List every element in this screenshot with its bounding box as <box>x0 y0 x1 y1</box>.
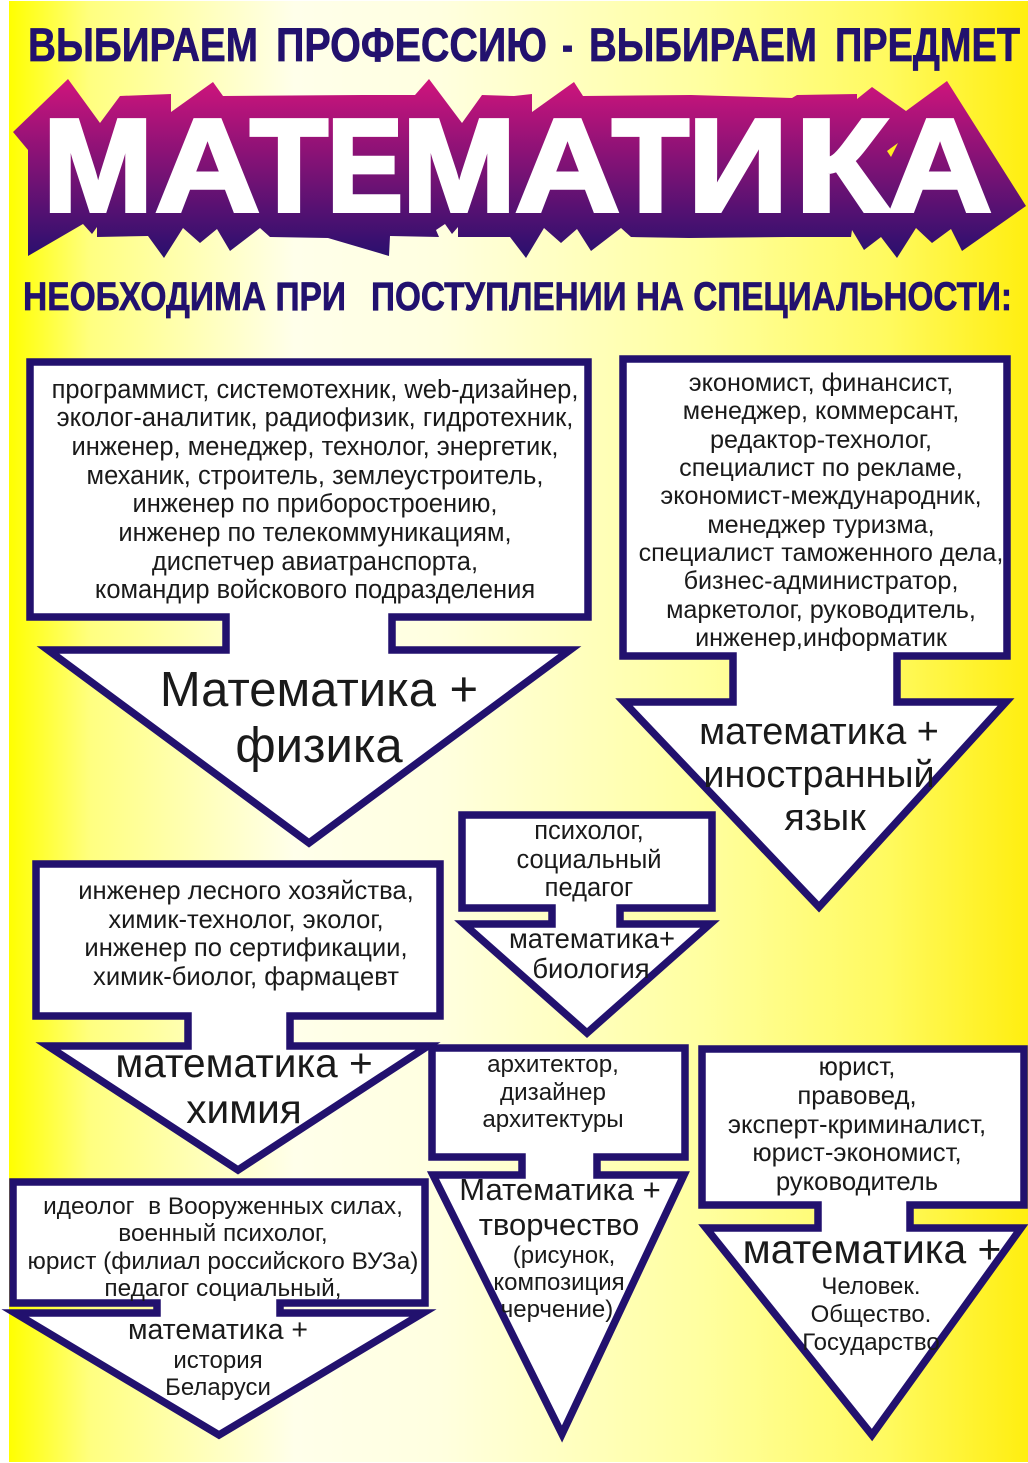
panel: mathematics + history of Belarus: Беларуси <box>165 1374 271 1401</box>
panel: mathematics + man, society, state: математика + <box>743 1226 1001 1272</box>
panel: mathematics + creativity <box>432 1048 685 1434</box>
panel: mathematics + chemistry: химия <box>186 1086 302 1132</box>
title banner: mathematics: Т <box>612 92 689 239</box>
panel: mathematics + foreign language: экономист-международник, <box>660 482 982 510</box>
title banner: mathematics: А <box>155 92 260 239</box>
panel: mathematics + history of Belarus: математика + <box>128 1314 308 1346</box>
panel: mathematics + biology: математика+ <box>509 923 675 954</box>
panel: mathematics + foreign language: менеджер, коммерсант, <box>683 397 959 425</box>
title banner: mathematics: К <box>795 92 889 239</box>
subheading: required for admission to specialties: НЕОБХОДИМА ПРИ <box>23 275 346 319</box>
title banner: mathematics: Т <box>250 92 328 239</box>
title banner: mathematics: А <box>888 92 992 239</box>
panel: mathematics + foreign language: специалист по рекламе, <box>679 454 963 482</box>
panel: mathematics + physics: физика <box>235 719 403 773</box>
panel: mathematics + man, society, state <box>702 1049 1024 1435</box>
panel: mathematics + creativity: Математика + <box>459 1172 661 1207</box>
panel: mathematics + history of Belarus: военный психолог, <box>118 1220 328 1247</box>
panel: mathematics + biology: биология <box>532 953 650 984</box>
panel: mathematics + physics: эколог-аналитик, радиофизик, гидротехник, <box>57 404 573 432</box>
panel: mathematics + physics: инженер по телекоммуникациям, <box>118 519 512 547</box>
panel: mathematics + physics: инженер по приборостроению, <box>132 490 498 518</box>
title banner: mathematics: И <box>688 92 788 239</box>
panel: mathematics + physics: инженер, менеджер, технолог, энергетик, <box>72 433 558 461</box>
panel: mathematics + biology: педагог <box>545 874 633 902</box>
heading: choose profession, choose subject <box>28 18 1020 71</box>
title banner: mathematics: А <box>515 92 620 239</box>
title banner: mathematics: М <box>402 92 516 239</box>
panel: mathematics + history of Belarus: идеолог в Вооруженных силах, <box>43 1193 403 1220</box>
panel: mathematics + physics <box>30 362 588 843</box>
panel: mathematics + physics: диспетчер авиатранспорта, <box>152 548 478 576</box>
panel: mathematics + foreign language: менеджер туризма, <box>707 511 935 539</box>
panel: mathematics + chemistry: инженер по сертификации, <box>84 934 408 962</box>
panel: mathematics + man, society, state: Государство <box>802 1329 940 1356</box>
heading: choose profession, choose subject: ВЫБИРАЕМ <box>589 18 817 71</box>
heading: choose profession, choose subject: - <box>562 18 573 71</box>
panel: mathematics + creativity: дизайнер <box>500 1079 606 1106</box>
heading: choose profession, choose subject: ПРОФЕССИЮ <box>276 18 547 71</box>
heading: choose profession, choose subject: ВЫБИРАЕМ <box>28 18 258 71</box>
panel: mathematics + foreign language: специалист таможенного дела, <box>639 539 1003 567</box>
panel: mathematics + man, society, state: эксперт-криминалист, <box>728 1111 986 1139</box>
panel: mathematics + man, society, state: юрист-экономист, <box>752 1139 962 1167</box>
panel: mathematics + creativity: черчение) <box>501 1296 613 1323</box>
panel: mathematics + man, society, state: Человек. <box>821 1273 921 1300</box>
panel: mathematics + foreign language: экономист, финансист, <box>689 369 953 397</box>
panel: mathematics + chemistry: математика + <box>115 1040 373 1086</box>
panel: mathematics + foreign language <box>623 359 1007 907</box>
panel: mathematics + man, society, state: Общество. <box>811 1301 931 1328</box>
panel: mathematics + creativity: архитектуры <box>482 1106 624 1133</box>
panel: mathematics + foreign language: редактор-технолог, <box>710 426 932 454</box>
panel: mathematics + man, society, state: руководитель <box>776 1168 938 1196</box>
title banner: mathematics: М <box>43 92 153 239</box>
panel: mathematics + creativity: творчество <box>479 1207 639 1242</box>
panel: mathematics + history of Belarus: педагог социальный, <box>104 1275 342 1302</box>
panel: mathematics + history of Belarus <box>13 1182 425 1435</box>
panel: mathematics + biology: психолог, <box>534 817 644 845</box>
panel: mathematics + chemistry <box>36 864 440 1170</box>
panel: mathematics + foreign language: бизнес-администратор, <box>684 567 958 595</box>
subheading: required for admission to specialties <box>23 275 1012 319</box>
panel: mathematics + creativity: архитектор, <box>487 1051 619 1078</box>
panel: mathematics + chemistry: инженер лесного хозяйства, <box>78 877 414 905</box>
panel: mathematics + biology: социальный <box>516 846 662 874</box>
panel: mathematics + physics: механик, строитель, землеустроитель, <box>87 462 543 490</box>
panel: mathematics + man, society, state: правовед, <box>797 1082 917 1110</box>
title banner: mathematics <box>13 79 1026 258</box>
panel: mathematics + foreign language: маркетолог, руководитель, <box>666 596 976 624</box>
panel: mathematics + history of Belarus: юрист (филиал российского ВУЗа) <box>28 1248 418 1275</box>
panel: mathematics + chemistry: химик-технолог, эколог, <box>108 906 384 934</box>
title banner: mathematics: Е <box>327 92 403 239</box>
panel: mathematics + creativity: композиция <box>493 1269 625 1296</box>
panel: mathematics + biology <box>462 815 712 1033</box>
panel: mathematics + man, society, state: юрист, <box>819 1053 895 1081</box>
panel: mathematics + physics: Математика + <box>160 663 478 717</box>
panel: mathematics + foreign language: математика + <box>699 711 939 753</box>
panel: mathematics + foreign language: инженер,информатик <box>695 624 948 652</box>
panel: mathematics + physics: программист, системотехник, web-дизайнер, <box>52 376 578 404</box>
panel: mathematics + history of Belarus: история <box>173 1347 263 1374</box>
panel: mathematics + foreign language: язык <box>784 797 866 839</box>
panel: mathematics + chemistry: химик-биолог, фармацевт <box>93 963 399 991</box>
panel: mathematics + physics: командир войскового подразделения <box>95 576 535 604</box>
panel: mathematics + foreign language: иностранный <box>703 754 935 796</box>
panel: mathematics + creativity: (рисунок, <box>513 1242 615 1269</box>
